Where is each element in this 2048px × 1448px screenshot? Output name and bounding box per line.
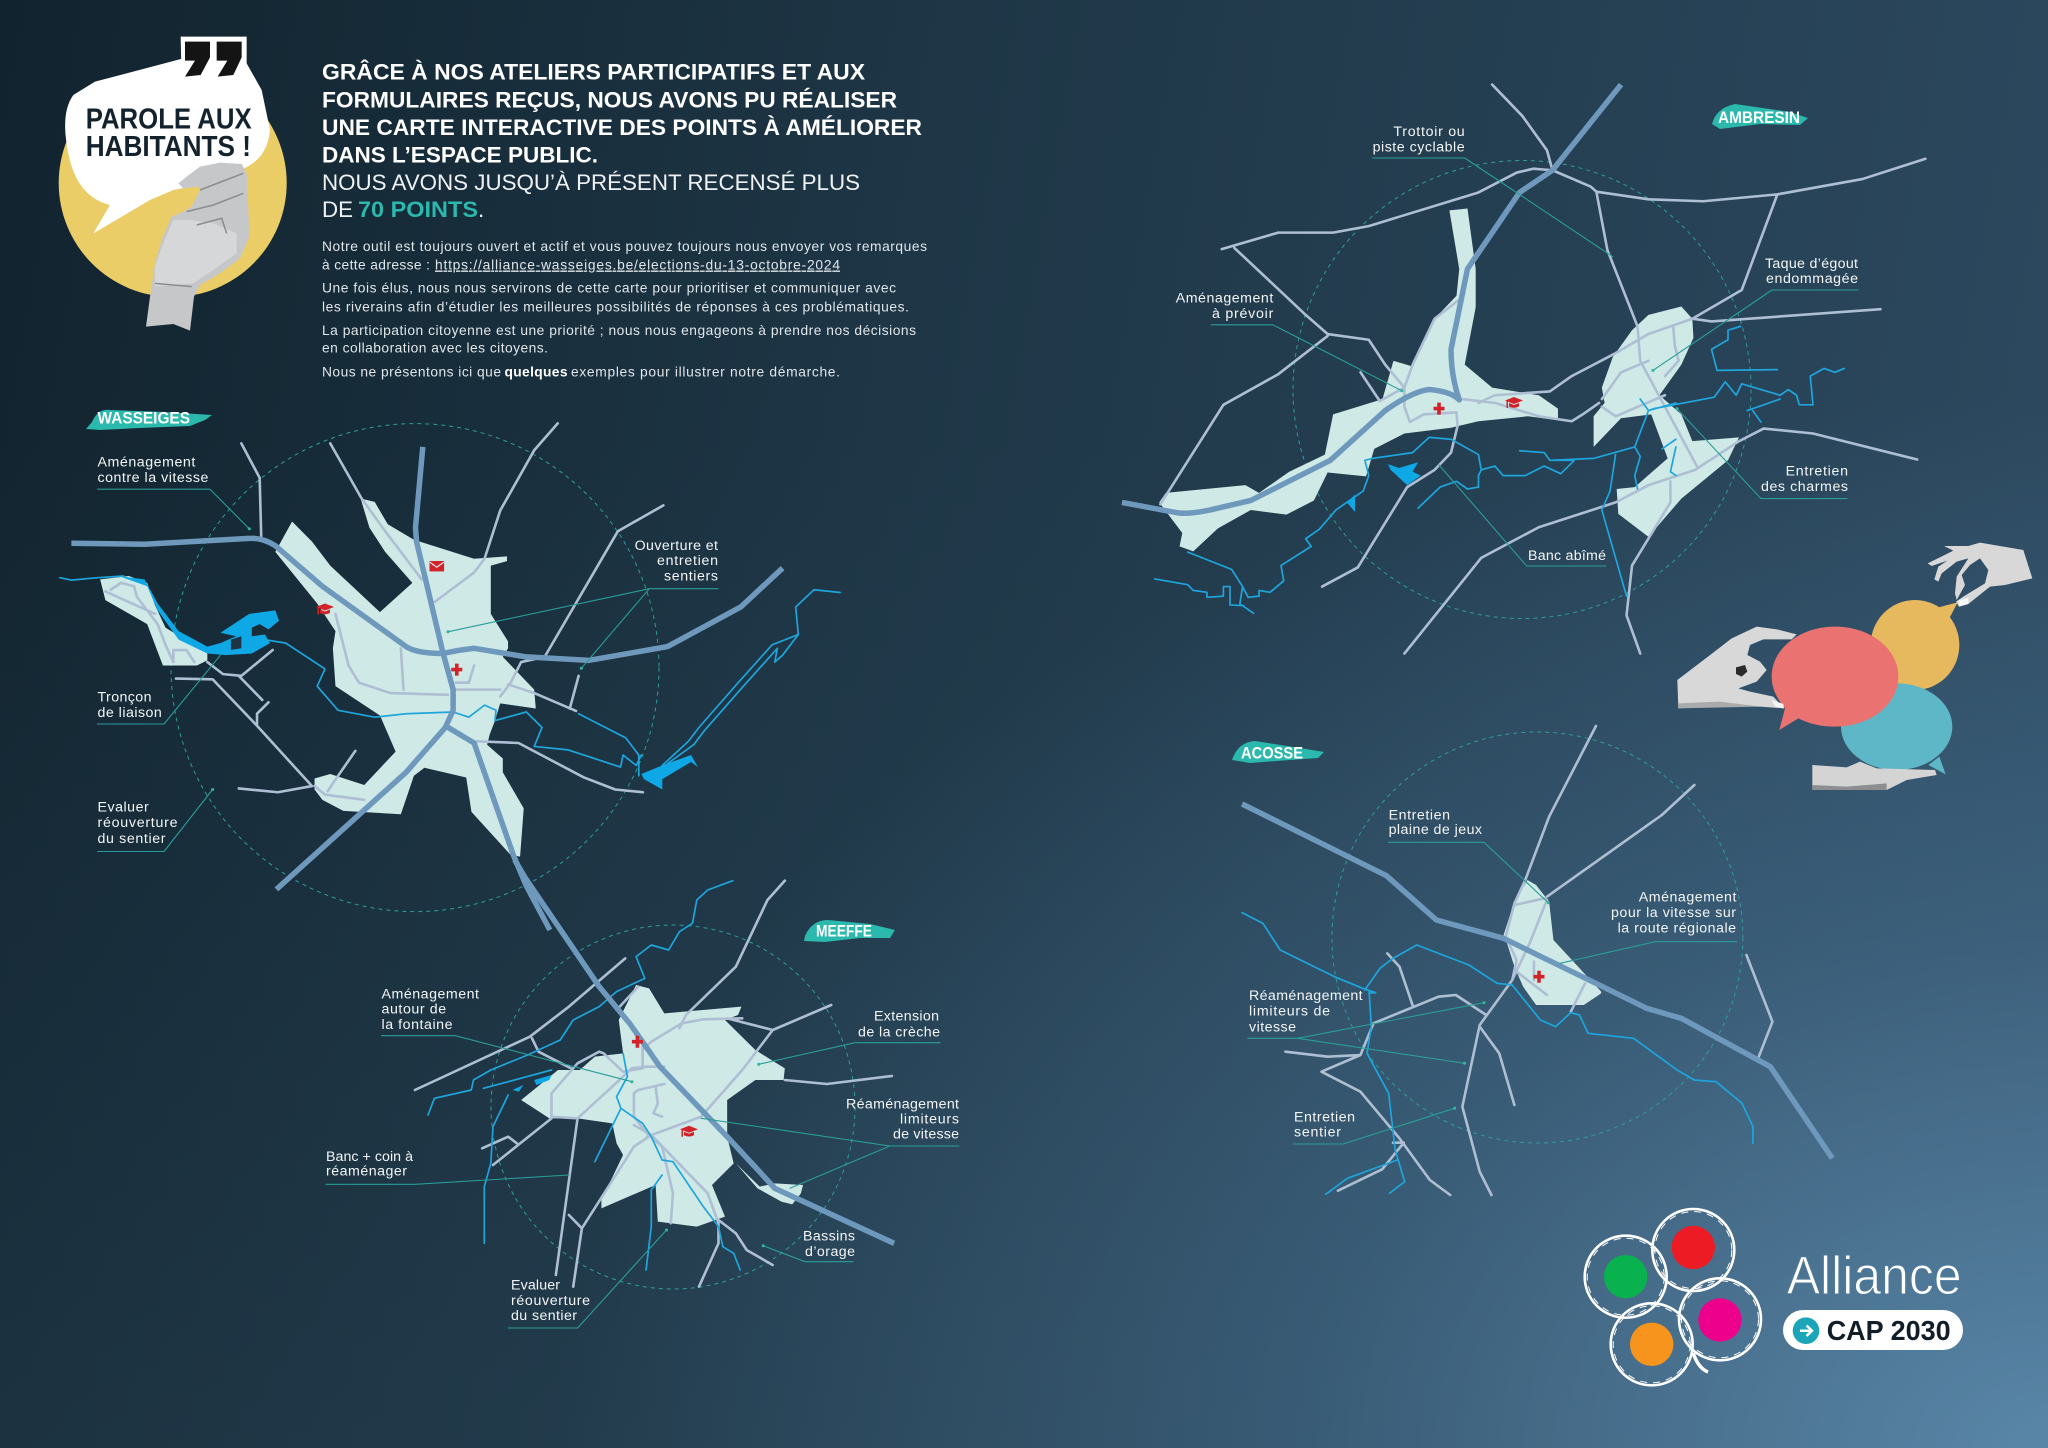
callout: entretien plaine de jeux — [1389, 807, 1548, 903]
logo: Alliance Cap 2030 — [1585, 1209, 1963, 1385]
influence circle — [171, 424, 659, 912]
callout: entretien sentier: sentier — [1294, 1125, 1341, 1141]
callout: banc abîmé: Banc abîmé — [1528, 548, 1606, 564]
callout: évaluer réouverture du sentier: réouverture — [98, 815, 178, 831]
callout: réaménagement limiteurs de vitesse: limiteurs — [900, 1111, 959, 1127]
intro heading: NOUS AVONS JUSQU’À PRÉSENT RECENSÉ PLUS — [322, 170, 860, 195]
callout: entretien des charmes: des charmes — [1761, 479, 1848, 495]
callout: entretien plaine de jeux: Entretien — [1389, 807, 1450, 823]
callout: évaluer réouverture du sentier — [98, 790, 213, 852]
map name: Wasseiges: WASSEIGES — [98, 408, 190, 427]
callout: banc et coin à réaménager — [326, 1149, 569, 1184]
panel: Acosse map — [1232, 726, 1832, 1195]
map drawing — [1242, 726, 1832, 1195]
callout: trottoir ou piste cyclable — [1373, 124, 1613, 257]
map name: Acosse: ACOSSE — [1241, 743, 1303, 762]
callout: aménagement contre la vitesse: contre la vitesse — [98, 470, 209, 486]
callout: extension de la crèche — [759, 1009, 940, 1064]
callout: entretien sentier: Entretien — [1294, 1109, 1355, 1125]
intro heading: DANS L’ESPACE PUBLIC. — [322, 142, 598, 167]
panel: parole aux habitants badge — [59, 37, 287, 331]
map drawing — [60, 423, 840, 930]
hand left — [1677, 627, 1797, 708]
yellow speech bubble — [1871, 600, 1959, 690]
callout: réaménagement limiteurs de vitesse: limiteurs de — [1249, 1004, 1330, 1020]
icon: school — [680, 1126, 698, 1137]
intro body text: La participation citoyenne est une priorité ; nous nous engageons à prendre nos décisions — [322, 323, 916, 338]
icon: health cross — [632, 1036, 643, 1048]
callout: évaluer réouverture du sentier — [508, 1230, 667, 1328]
intro body text — [322, 239, 927, 380]
logo pill: Cap 2030 — [1783, 1310, 1963, 1350]
callout: banc et coin à réaménager: réaménager — [326, 1164, 407, 1180]
callout: ouverture et entretien sentiers: Ouverture et — [635, 538, 718, 554]
intro heading — [322, 59, 922, 222]
callout: évaluer réouverture du sentier: réouverture — [511, 1293, 590, 1309]
callout: évaluer réouverture du sentier: du sentier — [98, 831, 166, 847]
badge title: PAROLE AUX — [86, 103, 252, 135]
callout: réaménagement limiteurs de vitesse — [1248, 988, 1484, 1063]
callout: tronçon de liaison: Tronçon — [98, 690, 152, 706]
callout: aménagement à prévoir — [1176, 290, 1402, 391]
map drawing — [415, 860, 894, 1287]
red speech bubble — [1772, 627, 1898, 730]
callout: bassins d'orage: d’orage — [805, 1244, 855, 1260]
influence circle — [1293, 160, 1751, 618]
intro body text: https://alliance-wasseiges.be/elections-du-13-octobre-2024 — [435, 258, 840, 272]
callout: extension de la crèche: de la crèche — [858, 1024, 940, 1040]
callout: entretien des charmes — [1677, 409, 1848, 499]
intro heading: . — [478, 197, 484, 222]
callout: aménagement autour de la fontaine — [382, 987, 632, 1082]
callout: ouverture et entretien sentiers — [448, 538, 718, 668]
intro body text: les riverains afin d’étudier les meilleures possibilités de réponses à ces problématiques. — [322, 300, 909, 315]
callout: réaménagement limiteurs de vitesse: de vitesse — [893, 1127, 959, 1143]
blue speech bubble — [1841, 683, 1952, 774]
map name: Acosse — [1232, 741, 1324, 763]
intro body text: Nous ne présentons ici que — [322, 365, 501, 380]
logo pill: Cap 2030: CAP 2030 — [1827, 1315, 1951, 1346]
callout: aménagement contre la vitesse — [98, 454, 249, 529]
callout: tronçon de liaison — [98, 655, 220, 724]
icon: health cross — [1534, 971, 1544, 983]
intro heading: GRÂCE À NOS ATELIERS PARTICIPATIFS ET AUX — [322, 59, 865, 84]
callout: bassins d'orage: Bassins — [803, 1229, 855, 1245]
callout: bassins d'orage — [763, 1229, 855, 1262]
callout: évaluer réouverture du sentier: Evaluer — [511, 1277, 560, 1293]
intro body text: Notre outil est toujours ouvert et actif et vous pouvez toujours nous envoyer vos remarques — [322, 239, 927, 254]
yellow circle — [59, 69, 287, 297]
callout: aménagement contre la vitesse: Aménagement — [98, 454, 195, 470]
intro heading: DE — [322, 197, 353, 222]
intro body text: exemples pour illustrer notre démarche. — [571, 365, 840, 380]
callout: aménagement pour la vitesse: Aménagement — [1639, 890, 1736, 906]
callout: évaluer réouverture du sentier: Evaluer — [98, 800, 149, 816]
intro body text: Une fois élus, nous nous servirons de cette carte pour prioritiser et communiquer avec — [322, 281, 896, 296]
intro body text: en collaboration avec les citoyens. — [322, 341, 548, 356]
logo symbol: four circles — [1585, 1209, 1761, 1385]
callout: aménagement autour de la fontaine: autour de — [382, 1002, 446, 1018]
callout: extension de la crèche: Extension — [874, 1009, 939, 1025]
influence circle — [1332, 732, 1743, 1143]
callout: ouverture et entretien sentiers: sentiers — [664, 568, 718, 584]
callout: taque d'égout endommagée: endommagée — [1766, 271, 1858, 287]
hand top right — [1928, 543, 2032, 607]
intro heading: 70 POINTS — [358, 197, 478, 222]
speech bubble with quote marks and hand — [65, 37, 270, 331]
map name: Meeffe: MEEFFE — [816, 922, 872, 941]
map drawing — [1122, 85, 1925, 654]
callout: banc abîmé — [1439, 465, 1606, 566]
badge title — [86, 103, 252, 163]
intro body text: quelques — [504, 365, 568, 380]
callout: réaménagement limiteurs de vitesse — [701, 1097, 959, 1188]
callout: aménagement pour la vitesse: la route régionale — [1618, 920, 1736, 936]
logo wordmark: Alliance — [1787, 1246, 1962, 1306]
icon: school — [316, 604, 334, 614]
callout: taque d'égout endommagée — [1653, 256, 1858, 370]
illustration: hands holding speech bubbles — [1677, 543, 2032, 790]
callout: taque d'égout endommagée: Taque d’égout — [1765, 256, 1858, 272]
callout: aménagement à prévoir: Aménagement — [1176, 290, 1273, 306]
callout: trottoir ou piste cyclable: Trottoir ou — [1393, 124, 1465, 140]
callout: ouverture et entretien sentiers: entretien — [657, 553, 718, 569]
callout: tronçon de liaison: de liaison — [98, 705, 162, 721]
badge title: HABITANTS ! — [86, 131, 251, 163]
callout: banc et coin à réaménager: Banc + coin à — [326, 1149, 413, 1165]
icon: health cross — [451, 664, 462, 676]
intro heading: UNE CARTE INTERACTIVE DES POINTS À AMÉLIORER — [322, 115, 922, 140]
callout: évaluer réouverture du sentier: du sentier — [511, 1308, 577, 1324]
callout: réaménagement limiteurs de vitesse: Réaménagement — [1249, 988, 1363, 1004]
callout: entretien des charmes: Entretien — [1786, 464, 1848, 480]
intro body text: à cette adresse : — [322, 258, 430, 272]
panel: Meeffe map — [326, 860, 959, 1328]
intro heading: FORMULAIRES REÇUS, NOUS AVONS PU RÉALISER — [322, 87, 897, 112]
callout: réaménagement limiteurs de vitesse: vitesse — [1249, 1019, 1296, 1035]
callout: entretien sentier — [1293, 1108, 1455, 1144]
map name: Meeffe — [804, 920, 895, 942]
hand bottom — [1812, 762, 1937, 790]
callout: entretien plaine de jeux: plaine de jeux — [1389, 822, 1482, 838]
callout: aménagement à prévoir: à prévoir — [1212, 306, 1274, 322]
icon: school — [1505, 397, 1523, 408]
icon: health cross — [1434, 403, 1444, 415]
callout: réaménagement limiteurs de vitesse: Réaménagement — [846, 1097, 959, 1113]
callout: aménagement autour de la fontaine: la fontaine — [382, 1017, 453, 1033]
icon: post office — [430, 561, 444, 571]
callout: aménagement pour la vitesse: pour la vitesse sur — [1611, 905, 1736, 921]
map name: Ambresin: AMBRESIN — [1718, 108, 1800, 127]
callout: aménagement autour de la fontaine: Aménagement — [382, 987, 479, 1003]
influence circle — [491, 925, 855, 1289]
panel: Wasseiges map — [60, 408, 840, 930]
callout: trottoir ou piste cyclable: piste cyclable — [1373, 140, 1465, 156]
callout: aménagement pour la vitesse — [1560, 890, 1736, 963]
panel: Ambresin map — [1122, 85, 1925, 654]
